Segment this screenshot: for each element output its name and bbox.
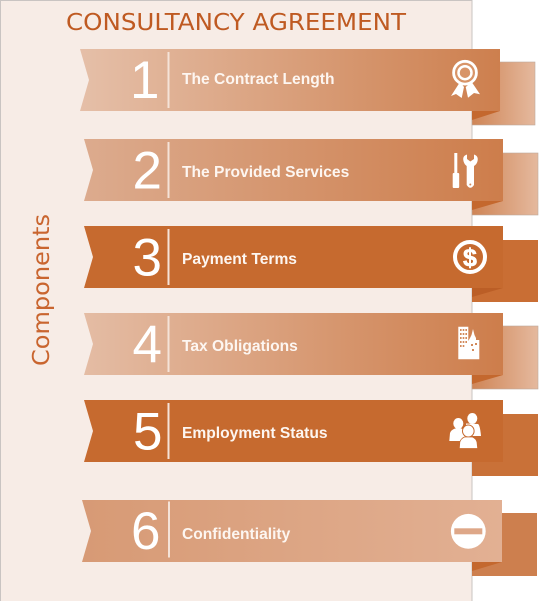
icon: no entry xyxy=(451,514,486,549)
ribbon 2: The Provided Services xyxy=(84,139,538,215)
icon: buildings xyxy=(458,327,479,359)
title: CONSULTANCY AGREEMENT xyxy=(66,10,407,36)
number 2: 2 xyxy=(132,142,162,200)
vertical heading: Components xyxy=(27,214,55,366)
label 4: Tax Obligations xyxy=(182,338,298,355)
icon: people group xyxy=(449,413,481,448)
icon: tools xyxy=(453,153,478,188)
ribbon 5: Employment Status xyxy=(84,400,538,476)
label 6: Confidentiality xyxy=(182,526,291,543)
ribbon 1: The Contract Length xyxy=(80,49,535,125)
ribbon 6: Confidentiality xyxy=(82,500,537,576)
icon: dollar coin xyxy=(455,242,485,272)
label 1: The Contract Length xyxy=(182,71,334,88)
icon: dollar coin: $ xyxy=(463,244,477,272)
number 6: 6 xyxy=(131,502,160,561)
number 3: 3 xyxy=(132,228,162,288)
number 4: 4 xyxy=(132,316,162,374)
label 2: The Provided Services xyxy=(182,164,350,181)
number 1: 1 xyxy=(130,51,159,110)
label 3: Payment Terms xyxy=(182,251,297,268)
number 5: 5 xyxy=(133,402,162,462)
ribbon 4: Tax Obligations xyxy=(84,313,538,389)
icon: award ribbon xyxy=(451,61,480,98)
label 5: Employment Status xyxy=(182,425,328,442)
ribbon 3: Payment Terms xyxy=(84,226,538,302)
